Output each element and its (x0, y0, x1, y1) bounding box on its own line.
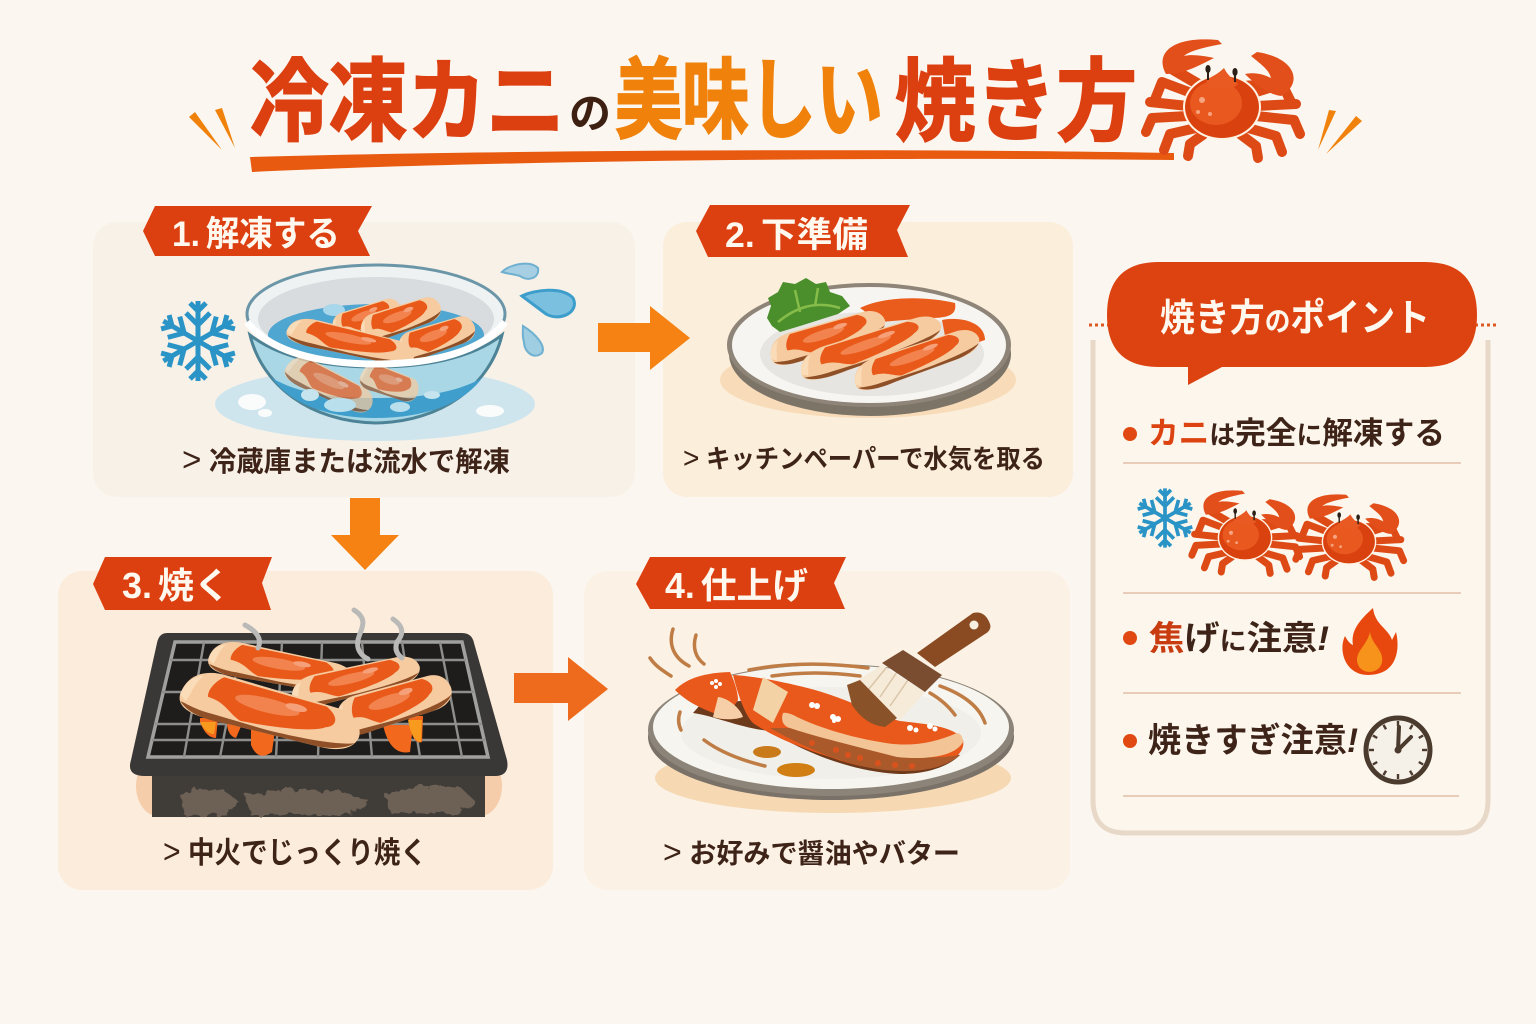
point 2 text and flame icon: 焦げに注意! (1149, 620, 1329, 658)
arrow: step 3 to step 4 (514, 657, 608, 721)
arrow: step 1 to step 3 (331, 498, 399, 570)
title underline stroke (250, 150, 1174, 172)
point 2 text and flame icon (1123, 608, 1398, 675)
icon: snowflake (157, 301, 239, 381)
title: の (569, 90, 611, 137)
panel: step 4 finish (584, 557, 1070, 890)
ribbon: step 4 heading (636, 557, 846, 609)
panel: step 1 thaw (93, 206, 635, 497)
speech bubble heading: 焼き方のポイント (1160, 298, 1430, 340)
panel: step 2 prep (663, 205, 1073, 497)
caption: step 1: > 冷蔵庫または流水で解凍 (182, 441, 510, 479)
panel: step 3 grill (58, 557, 553, 890)
caption: step 2: > キッチンペーパーで水気を取る (683, 442, 1045, 475)
illustration: crab legs in a glass bowl of water (215, 264, 574, 441)
ribbon: step 4 heading: 4.仕上げ (665, 565, 808, 606)
caption: step 4: > お好みで醤油やバター (663, 834, 960, 870)
accent marks: right (1318, 110, 1362, 154)
illustration: crab legs on a charcoal grill (130, 610, 508, 817)
title (250, 51, 1137, 153)
point 3 text and clock icon: 焼きすぎ注意! (1148, 722, 1358, 760)
illustration: brushing sauce on a crab leg (648, 612, 1014, 813)
title: 美味しい (615, 51, 883, 150)
icon: title crab (1146, 39, 1300, 158)
ribbon: step 2 heading: 2.下準備 (725, 216, 868, 255)
speech bubble heading (1107, 262, 1477, 385)
title: 焼き方 (895, 53, 1137, 153)
ribbon: step 2 heading (696, 205, 910, 257)
illustration: crab legs on a plate with a leaf (720, 278, 1016, 418)
panel: key points (1089, 262, 1496, 833)
caption: step 3: > 中火でじっくり焼く (163, 833, 427, 871)
point 3 text and clock icon (1123, 718, 1430, 782)
point 1 text: カニは完全に解凍する (1148, 416, 1445, 451)
title: 冷凍カニ (250, 53, 565, 153)
icon: snowflake and two crabs (1135, 488, 1404, 577)
ribbon: step 3 heading: 3.焼く (122, 565, 230, 606)
accent marks: left (189, 108, 235, 150)
ribbon: step 3 heading (93, 557, 272, 610)
ribbon: step 1 heading (143, 206, 372, 256)
ribbon: step 1 heading: 1.解凍する (172, 215, 340, 254)
arrow: step 1 to step 2 (598, 306, 690, 370)
